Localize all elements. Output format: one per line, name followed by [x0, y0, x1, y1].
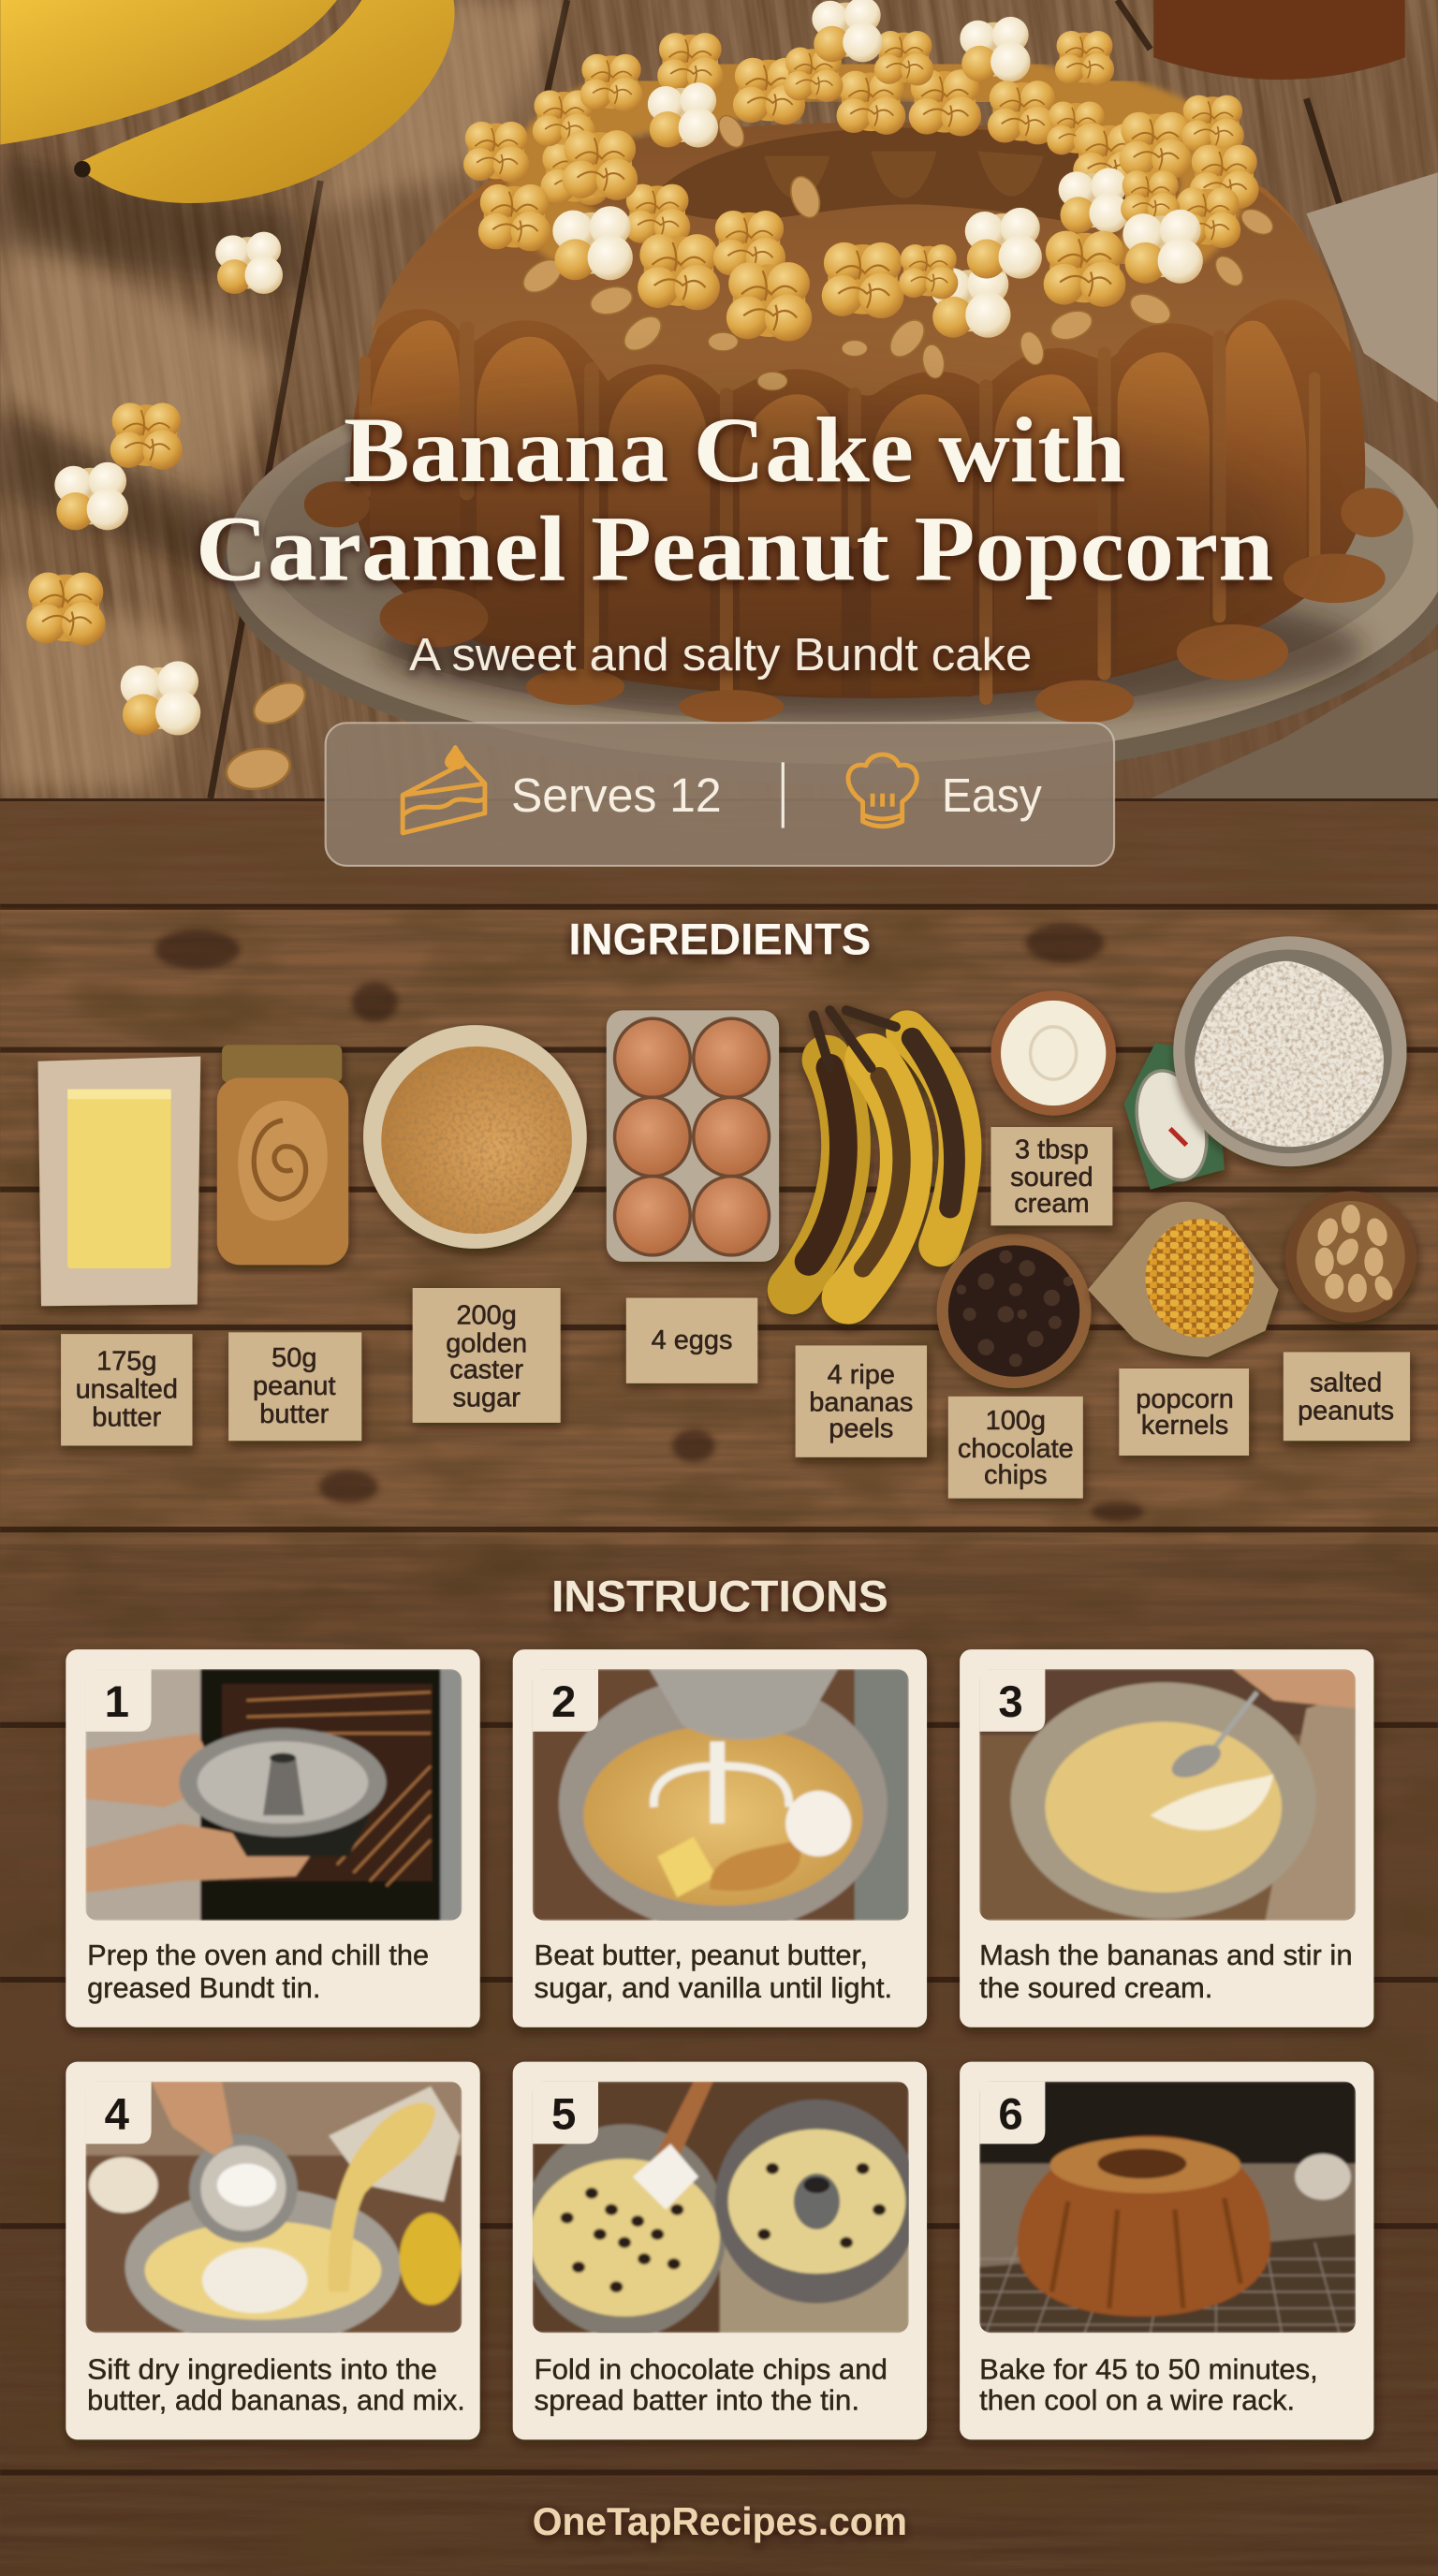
photo: tin going into oven: [85, 1669, 462, 1921]
label: 4 ripe bananas peels: [796, 1345, 927, 1457]
label: salted peanuts: peanuts: [1298, 1396, 1394, 1426]
step 2 text: [535, 1939, 892, 2004]
step 6 text: then cool on a wire rack.: [979, 2384, 1295, 2417]
label: 50g peanut butter: [228, 1332, 361, 1441]
label: 4 ripe bananas peels: 4 ripe: [828, 1360, 895, 1390]
label: 4 ripe bananas peels: peels: [829, 1414, 893, 1444]
label: popcorn kernels: popcorn: [1136, 1384, 1234, 1414]
label: 200g golden caster sugar: [413, 1288, 561, 1423]
label: 100g chocolate chips: chips: [984, 1460, 1048, 1490]
step 6 text: Bake for 45 to 50 minutes,: [979, 2352, 1318, 2385]
step number 4: 4: [105, 2090, 130, 2140]
serves text: Serves 12: [511, 768, 722, 822]
step 4 text: butter, add bananas, and mix.: [87, 2384, 465, 2417]
photo: baked cake on wire rack: [979, 2082, 1356, 2333]
cake: [304, 123, 1403, 723]
step 2 text: sugar, and vanilla until light.: [535, 1971, 892, 2004]
step 4 text: Sift dry ingredients into the: [87, 2352, 437, 2385]
label: 200g golden caster sugar: caster: [449, 1355, 523, 1385]
step 3 text: the soured cream.: [979, 1971, 1212, 2004]
label: salted peanuts: salted: [1310, 1368, 1382, 1398]
label: 175g unsalted butter: [61, 1334, 192, 1445]
step number 1: 1: [105, 1677, 129, 1727]
step 1 text: Prep the oven and chill the: [87, 1939, 429, 1971]
step 3 text: [979, 1939, 1353, 2004]
step 1 text: [87, 1939, 429, 2004]
step number 1: [85, 1669, 152, 1732]
label: 100g chocolate chips: [948, 1397, 1083, 1499]
step card 1: [66, 1649, 480, 2027]
ingredient: butter: [38, 1057, 200, 1306]
label: 175g unsalted butter: unsalted: [76, 1375, 178, 1405]
label: 3 tbsp soured cream: [990, 1127, 1112, 1225]
label: 100g chocolate chips: chocolate: [958, 1434, 1074, 1464]
step number 3: 3: [998, 1677, 1023, 1727]
step number 6: 6: [998, 2090, 1023, 2140]
hero photo: banana bundt cake on wood: [0, 0, 1438, 798]
label: 175g unsalted butter: 175g: [96, 1347, 156, 1377]
photo: sifting flour and pouring batter: [85, 2082, 462, 2346]
label: 200g golden caster sugar: sugar: [452, 1383, 521, 1412]
step card 2: [513, 1649, 927, 2027]
label: salted peanuts: [1284, 1352, 1410, 1441]
label: 50g peanut butter: butter: [259, 1399, 330, 1429]
subtitle: A sweet and salty Bundt cake: [409, 630, 1032, 681]
label: popcorn kernels: [1119, 1368, 1249, 1456]
ingredient: golden caster sugar: [363, 1025, 587, 1249]
step number 2: 2: [551, 1677, 576, 1727]
ingredient: eggs in carton: [607, 1010, 779, 1262]
step 6 text: [979, 2352, 1318, 2417]
photo: mashed banana bowl: [979, 1669, 1356, 1921]
label: 200g golden caster sugar: golden: [446, 1328, 527, 1358]
label: popcorn kernels: kernels: [1141, 1411, 1228, 1441]
title: Caramel Peanut Popcorn: [196, 497, 1273, 601]
title: Banana Cake with: [344, 398, 1125, 502]
heading: ingredients: INGREDIENTS: [568, 915, 871, 965]
step number 5: 5: [551, 2090, 576, 2140]
ingredient: chocolate chips bowl: [937, 1234, 1092, 1388]
difficulty text: Easy: [942, 768, 1042, 822]
step card 4: [66, 2062, 480, 2439]
photo: stand mixer bowl: [533, 1669, 909, 1932]
ingredient: salted peanuts bowl: [1285, 1191, 1416, 1323]
plate: [224, 423, 1438, 764]
label: 100g chocolate chips: 100g: [986, 1406, 1046, 1436]
title: [196, 398, 1273, 601]
step 5 text: Fold in chocolate chips and: [535, 2352, 888, 2385]
ingredient: kitchen scale: [1124, 1043, 1225, 1190]
label: 4 ripe bananas peels: bananas: [809, 1388, 913, 1418]
heading: instructions: INSTRUCTIONS: [551, 1573, 888, 1622]
ingredient: peanut butter jar: [217, 1045, 348, 1265]
icon: cake slice: [403, 748, 485, 833]
step 2 text: Beat butter, peanut butter,: [535, 1939, 868, 1971]
background: wood table: [0, 798, 1438, 2576]
label: 50g peanut butter: peanut: [253, 1371, 336, 1401]
step 4 text: [87, 2352, 465, 2417]
step card 5: [513, 2062, 927, 2439]
info pill: serves and difficulty: [326, 723, 1114, 866]
step card 3: [960, 1649, 1373, 2027]
label: 50g peanut butter: 50g: [271, 1343, 316, 1373]
step number 2: [533, 1669, 598, 1732]
photo: folding chips and filling tin: [522, 2082, 918, 2338]
step 3 text: Mash the bananas and stir in: [979, 1939, 1353, 1971]
step 5 text: spread batter into the tin.: [535, 2384, 859, 2417]
ingredient: soured cream bowl: [990, 990, 1116, 1116]
bananas: [0, 0, 455, 203]
step number 5: [533, 2082, 598, 2144]
label: 175g unsalted butter: butter: [92, 1402, 162, 1432]
label: 3 tbsp soured cream: cream: [1014, 1189, 1090, 1219]
ingredient: flour bowl: [1173, 936, 1407, 1166]
icon: chef hat: [848, 754, 917, 827]
label: 4 eggs: 4 eggs: [652, 1325, 732, 1355]
step number 6: [979, 2082, 1045, 2144]
step number 4: [85, 2082, 152, 2144]
cloth and jar: [1151, 0, 1438, 798]
scattered popcorn and peanuts: [26, 232, 312, 794]
popcorn and peanut topping: [463, 0, 1277, 390]
step card 6: [960, 2062, 1373, 2439]
ingredient: popcorn kernels sack: [1088, 1202, 1279, 1357]
label: 200g golden caster sugar: 200g: [456, 1301, 517, 1331]
shade behind title: [176, 394, 1293, 674]
step number 3: [979, 1669, 1045, 1732]
step 1 text: greased Bundt tin.: [87, 1971, 320, 2004]
label: 3 tbsp soured cream: 3 tbsp: [1015, 1134, 1089, 1164]
label: 3 tbsp soured cream: soured: [1010, 1163, 1093, 1193]
label: 4 eggs: [626, 1298, 757, 1383]
step 5 text: [535, 2352, 888, 2417]
ingredient: ripe bananas: [792, 1010, 961, 1298]
footer: website: OneTapRecipes.com: [533, 2499, 907, 2543]
